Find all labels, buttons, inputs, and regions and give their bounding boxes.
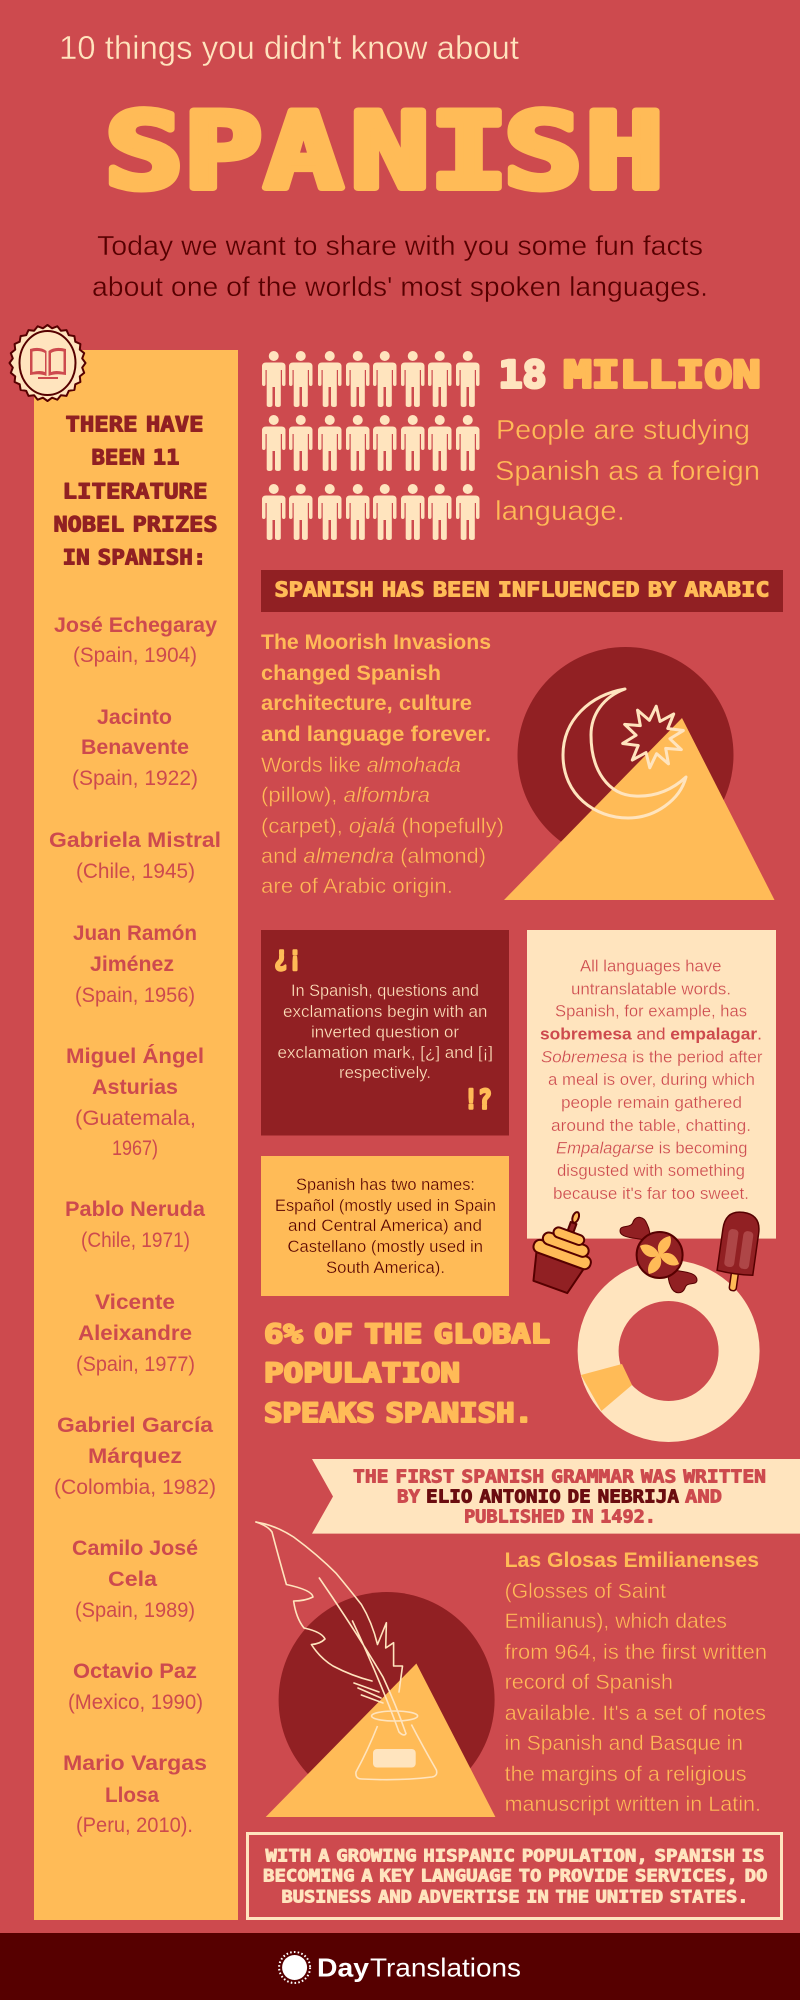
list of laureates: (Spain, 1977)	[76, 1352, 195, 1376]
callout: Hispanic population: BECOMING A KEY LANGUAGE TO PROVIDE SERVICES, DO	[263, 1866, 768, 1886]
ribbon: first Spanish grammar: PUBLISHED IN 1492.	[464, 1508, 656, 1528]
panel heading: BEEN 11	[92, 446, 180, 470]
card text	[278, 982, 493, 1082]
illustration: crescent and star	[504, 647, 774, 900]
intro text: about one of the worlds' most spoken languages.	[92, 271, 708, 302]
list of laureates: (Spain, 1922)	[72, 766, 198, 790]
list of laureates: Asturias	[92, 1075, 178, 1099]
list of laureates: (Spain, 1989)	[75, 1598, 195, 1622]
text block: Moorish invasions: (carpet), ojalá (hopefully)	[261, 814, 504, 838]
opening marks: ¿¡	[274, 941, 302, 972]
list of laureates: (Colombia, 1982)	[54, 1475, 216, 1499]
list of laureates: (Spain, 1904)	[73, 643, 197, 667]
stat description: Spanish as a foreign	[495, 455, 760, 486]
pictogram: rows of people	[262, 351, 480, 540]
text block: Las Glosas: Las Glosas Emilianenses	[505, 1549, 759, 1572]
card: two names: Castellano (mostly used in	[288, 1238, 483, 1256]
stat description: People are studying	[496, 414, 750, 445]
closing marks: !?	[464, 1084, 492, 1116]
text block: Las Glosas: the margins of a religious	[505, 1763, 747, 1786]
list of laureates: Octavio Paz	[73, 1659, 197, 1683]
stat heading: 6 percent	[264, 1319, 550, 1429]
list of laureates: Aleixandre	[78, 1321, 192, 1345]
card: untranslatable words: a meal is over, during which	[548, 1071, 755, 1089]
text block: Moorish invasions: changed Spanish	[261, 661, 441, 685]
list of laureates: (Chile, 1971)	[81, 1228, 190, 1252]
list of laureates: (Chile, 1945)	[76, 859, 195, 883]
list of laureates: (Mexico, 1990)	[68, 1690, 203, 1714]
list of laureates: (Peru, 2010).	[76, 1813, 193, 1837]
card: untranslatable words: disgusted with something	[557, 1162, 745, 1180]
card: untranslatable words: around the table, chatting.	[551, 1117, 751, 1135]
text block: Moorish invasions: (pillow), alfombra	[261, 783, 430, 807]
list of laureates: Llosa	[105, 1783, 160, 1807]
text block: Moorish invasions: are of Arabic origin.	[261, 874, 453, 898]
text block: Moorish invasions: Words like almohada	[261, 753, 461, 777]
text block: Las Glosas: (Glosses of Saint	[505, 1580, 666, 1603]
footer	[0, 1933, 800, 2000]
main title: SPANISH: SPANISH	[104, 91, 664, 213]
icon: cupcake	[522, 1202, 606, 1297]
list of laureates: Gabriela Mistral	[49, 828, 221, 852]
icon: popsicle	[715, 1210, 761, 1293]
text block: Las Glosas	[505, 1549, 767, 1816]
callout: Hispanic population: BUSINESS AND ADVERTISE IN THE UNITED STATES.	[282, 1888, 748, 1906]
stat description: language.	[495, 495, 625, 526]
card text: respectively.	[339, 1064, 431, 1082]
list of laureates: Cela	[108, 1567, 158, 1591]
list of laureates: (Guatemala,	[75, 1106, 196, 1130]
text block: Las Glosas: manuscript written in Latin.	[505, 1793, 761, 1816]
ribbon: first Spanish grammar: AND	[685, 1488, 722, 1508]
card: untranslatable words: people remain gathered	[561, 1094, 742, 1112]
unit: MILLION	[564, 354, 760, 396]
list of laureates: Pablo Neruda	[65, 1197, 206, 1221]
panel background	[34, 350, 238, 1920]
list of laureates: Camilo José	[72, 1536, 198, 1560]
logo wordmark: Translations	[370, 1952, 521, 1982]
stat description	[495, 414, 760, 526]
ribbon: first Spanish grammar: BY	[397, 1488, 420, 1508]
panel heading: THERE HAVE	[66, 412, 204, 436]
intro text: Today we want to share with you some fun facts	[97, 230, 703, 261]
logo wordmark	[317, 1952, 521, 1982]
text block: Moorish invasions	[261, 630, 504, 898]
text block: Las Glosas: available. It's a set of notes	[505, 1702, 766, 1725]
intro text	[92, 230, 708, 302]
logo mark	[279, 1952, 310, 1983]
card text: In Spanish, questions and	[291, 982, 479, 1000]
list of laureates: (Spain, 1956)	[75, 983, 195, 1007]
card: inverted punctuation	[261, 930, 509, 1136]
ribbon: first Spanish grammar: THE FIRST SPANISH GRAMMAR WAS WRITTEN	[353, 1468, 766, 1488]
text block: Las Glosas: from 964, is the first written	[505, 1641, 767, 1664]
card text: inverted question or	[311, 1024, 460, 1042]
text block: Moorish invasions: architecture, culture	[261, 691, 472, 715]
list of laureates	[49, 613, 221, 1837]
list of laureates: Juan Ramón	[73, 921, 197, 945]
card: two names: Spanish has two names:	[296, 1176, 475, 1194]
card text: exclamation mark, [¿] and [¡]	[278, 1044, 493, 1062]
card: untranslatable words: Spanish, for example, has	[555, 1002, 747, 1020]
stat heading: 6 percent: SPEAKS SPANISH.	[264, 1398, 533, 1429]
logo wordmark: Day	[317, 1952, 370, 1982]
card: untranslatable words: Empalagarse is becoming	[556, 1140, 748, 1158]
text block: Las Glosas: Emilianus), which dates	[505, 1610, 727, 1633]
text block: Moorish invasions: The Moorish Invasions	[261, 630, 491, 654]
list of laureates: Márquez	[88, 1444, 182, 1468]
chart: donut 6 percent	[581, 1280, 739, 1422]
text block: Las Glosas: record of Spanish	[505, 1671, 673, 1694]
list of laureates: José Echegaray	[54, 613, 217, 637]
stat heading: 6 percent: 6% OF THE GLOBAL	[264, 1319, 550, 1350]
list of laureates: Jiménez	[90, 952, 174, 976]
panel heading: IN SPANISH:	[62, 546, 206, 570]
section banner: Arabic influence: SPANISH HAS BEEN INFLUENCED BY ARABIC	[274, 578, 770, 602]
card: untranslatable words: sobremesa and empalagar .	[540, 1026, 762, 1044]
panel heading: NOBEL PRIZES	[54, 512, 218, 536]
list of laureates: Benavente	[81, 735, 189, 759]
icon: candy	[620, 1217, 697, 1293]
section banner: Arabic influence	[261, 570, 783, 612]
icon: book seal	[10, 325, 86, 401]
callout: Hispanic population: WITH A GROWING HISPANIC POPULATION, SPANISH IS	[266, 1846, 764, 1866]
number: 18	[498, 354, 546, 396]
card: untranslatable words	[527, 930, 776, 1239]
card: untranslatable words: because it's far too sweet.	[553, 1185, 749, 1203]
ribbon: first Spanish grammar: ELIO ANTONIO DE NEBRIJA	[426, 1488, 680, 1508]
list of laureates: 1967)	[112, 1136, 158, 1160]
inkwell	[356, 1711, 437, 1780]
list of laureates: Gabriel García	[57, 1413, 214, 1437]
card: two names: South America).	[326, 1259, 445, 1277]
panel heading: LITERATURE	[62, 480, 208, 504]
illustration: quill and inkwell	[256, 1522, 495, 1817]
ribbon: first Spanish grammar	[312, 1459, 800, 1534]
stat heading: 6 percent: POPULATION	[264, 1358, 460, 1389]
stat: 18 million	[495, 354, 760, 526]
card: untranslatable words: untranslatable words.	[571, 980, 731, 998]
list of laureates: Mario Vargas	[63, 1751, 207, 1775]
list of laureates: Vicente	[95, 1290, 175, 1314]
text block: Las Glosas: in Spanish and Basque in	[505, 1732, 743, 1755]
card: untranslatable words: All languages have	[580, 958, 722, 976]
text block: Moorish invasions: and almendra (almond)	[261, 844, 486, 868]
panel: Nobel prizes	[10, 325, 238, 1920]
callout: Hispanic population	[248, 1834, 782, 1918]
text block: Moorish invasions: and language forever.	[261, 722, 491, 746]
list of laureates: Miguel Ángel	[66, 1043, 204, 1068]
feather	[256, 1522, 406, 1735]
kicker line: 10 things you didn't know about	[59, 29, 519, 66]
list of laureates: Jacinto	[97, 705, 172, 729]
card: two names	[261, 1156, 509, 1296]
card text: exclamations begin with an	[283, 1003, 488, 1021]
title block	[59, 29, 708, 302]
card: two names: Español (mostly used in Spain	[275, 1197, 496, 1215]
card: untranslatable words: Sobremesa is the period after	[541, 1048, 763, 1066]
card: two names: and Central America) and	[288, 1217, 482, 1235]
panel heading	[54, 412, 218, 570]
